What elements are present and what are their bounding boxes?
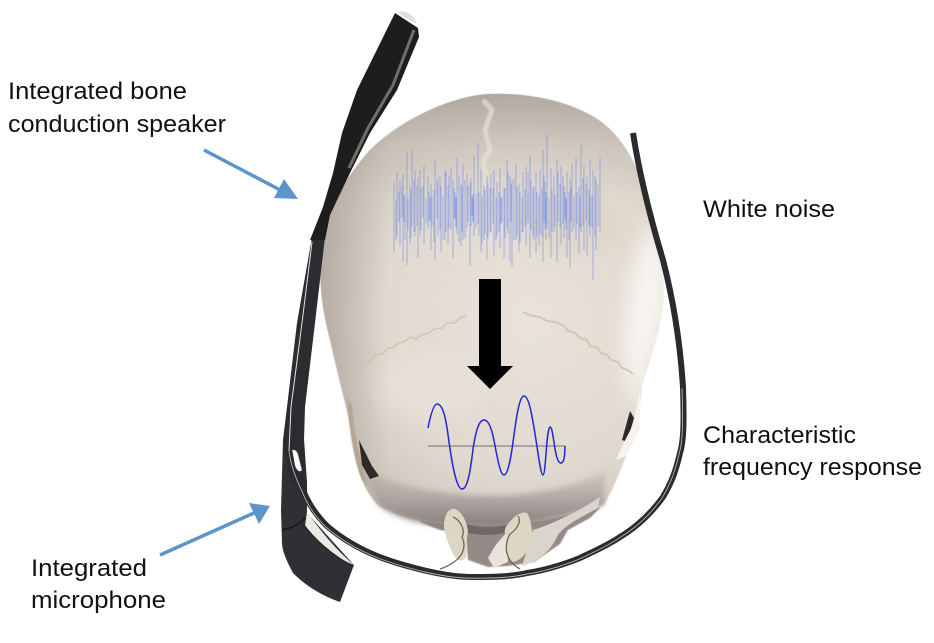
smart glasses frame	[281, 12, 684, 602]
skull illustration	[320, 94, 668, 569]
right temporal slit	[622, 411, 634, 442]
skull lit right edge	[624, 215, 668, 410]
long noise spikes	[394, 135, 600, 280]
label: characteristic frequency response	[703, 422, 922, 481]
frame highlight	[289, 388, 683, 578]
pod join line	[282, 518, 305, 530]
noise core	[396, 168, 598, 246]
left condyle	[440, 509, 468, 569]
label: characteristic frequency response: Characteristic	[703, 422, 856, 449]
temporal tan edge	[347, 397, 368, 486]
label: bone conduction speaker	[8, 78, 226, 138]
pod inner white strip	[305, 512, 354, 565]
label: white noise: White noise	[703, 196, 835, 223]
black down arrow	[467, 279, 513, 389]
occipital fragments	[522, 497, 600, 566]
skull base	[420, 490, 600, 567]
pod edge	[303, 524, 353, 567]
dark band under skull	[466, 524, 506, 535]
bright clusters of noise	[404, 192, 590, 226]
lower skull shadow	[358, 462, 606, 527]
label: integrated microphone: microphone	[31, 587, 166, 614]
camera pod	[281, 440, 354, 602]
lower arm	[283, 237, 325, 485]
forehead warm patches	[375, 195, 625, 420]
lambdoid suture left	[350, 316, 467, 377]
left temporal slit	[359, 440, 379, 479]
arm highlight	[349, 30, 414, 168]
white button	[292, 450, 302, 471]
right condyle	[505, 513, 532, 569]
label: integrated microphone: Integrated	[31, 555, 147, 582]
skull top shading	[321, 94, 655, 225]
baseline	[428, 445, 565, 447]
frequency response curve	[428, 396, 565, 489]
skull left shading	[320, 94, 664, 525]
right white gap	[616, 390, 640, 460]
arrow: to microphone	[160, 503, 270, 555]
response line	[428, 396, 565, 489]
arm side white line	[289, 242, 312, 451]
upper arm	[310, 13, 419, 240]
temple band	[290, 133, 684, 577]
arrow: to speaker	[204, 150, 298, 199]
arm white tip	[398, 12, 417, 24]
skull dome	[320, 94, 664, 525]
lambdoid suture right	[523, 312, 633, 374]
label: integrated microphone	[31, 555, 166, 614]
label: bone conduction speaker: conduction speaker	[8, 111, 226, 138]
white noise waveform	[394, 135, 600, 280]
label: bone conduction speaker: Integrated bone	[8, 78, 187, 105]
sagittal suture	[483, 100, 495, 257]
label: characteristic frequency response: frequency response	[703, 454, 922, 481]
